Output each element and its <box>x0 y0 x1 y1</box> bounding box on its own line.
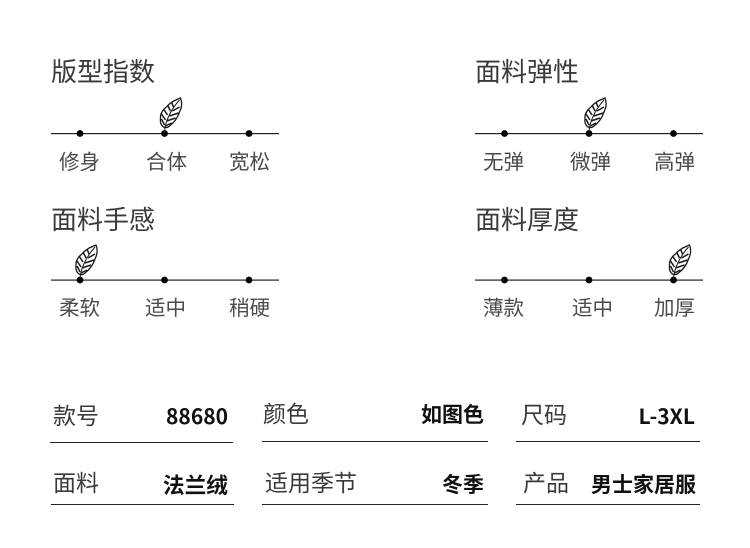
row item: style number <box>50 401 233 443</box>
label: regular: 合体 <box>146 151 187 174</box>
heading: fit index: 版型指数 <box>51 57 155 87</box>
spec table <box>50 399 700 505</box>
heading: fabric elasticity: 面料弹性 <box>475 57 579 87</box>
row item: colour <box>262 399 488 442</box>
row item: size: L-3XL <box>638 401 695 431</box>
heading: fabric thickness: 面料厚度 <box>475 205 579 235</box>
label: high stretch: 高弹 <box>654 151 695 174</box>
row item: fabric: 法兰绒 <box>163 469 228 500</box>
label: medium: 适中 <box>145 297 186 320</box>
scale: fabric elasticity <box>475 97 703 137</box>
scale: fabric hand feel <box>51 244 279 284</box>
label: slight stretch: 微弹 <box>570 151 611 174</box>
label: thick: 加厚 <box>654 297 695 320</box>
label: slim: 修身 <box>59 151 100 174</box>
row item: size: 尺码 <box>521 402 567 428</box>
row item: style number: 款号 <box>53 403 99 429</box>
panel: fabric thickness <box>475 205 703 320</box>
row item: season: 适用季节 <box>265 470 357 496</box>
scale: fit index <box>51 97 279 137</box>
label: medium: 适中 <box>572 297 613 320</box>
row item: season: 冬季 <box>442 469 484 499</box>
row item: style number: 88680 <box>166 401 228 431</box>
panel: fabric elasticity <box>475 57 703 174</box>
row item: colour: 如图色 <box>421 399 484 429</box>
panel: fabric hand feel <box>51 205 279 320</box>
label: soft: 柔软 <box>59 297 100 320</box>
heading: fabric hand feel: 面料手感 <box>51 205 155 235</box>
row item: season <box>262 469 488 505</box>
row item: product: 产品 <box>523 470 569 496</box>
label: loose: 宽松 <box>229 151 270 174</box>
row item: colour: 颜色 <box>263 401 309 427</box>
label: stiff: 稍硬 <box>229 297 270 320</box>
label: no stretch: 无弹 <box>483 151 524 174</box>
row item: fabric <box>51 469 234 505</box>
row item: product <box>516 469 700 505</box>
scale: fabric thickness <box>475 244 703 284</box>
row item: product: 男士家居服 <box>591 469 696 499</box>
row item: fabric: 面料 <box>53 470 99 496</box>
panel: fit index <box>51 57 279 174</box>
label: thin: 薄款 <box>483 297 524 320</box>
row item: size <box>516 401 700 442</box>
